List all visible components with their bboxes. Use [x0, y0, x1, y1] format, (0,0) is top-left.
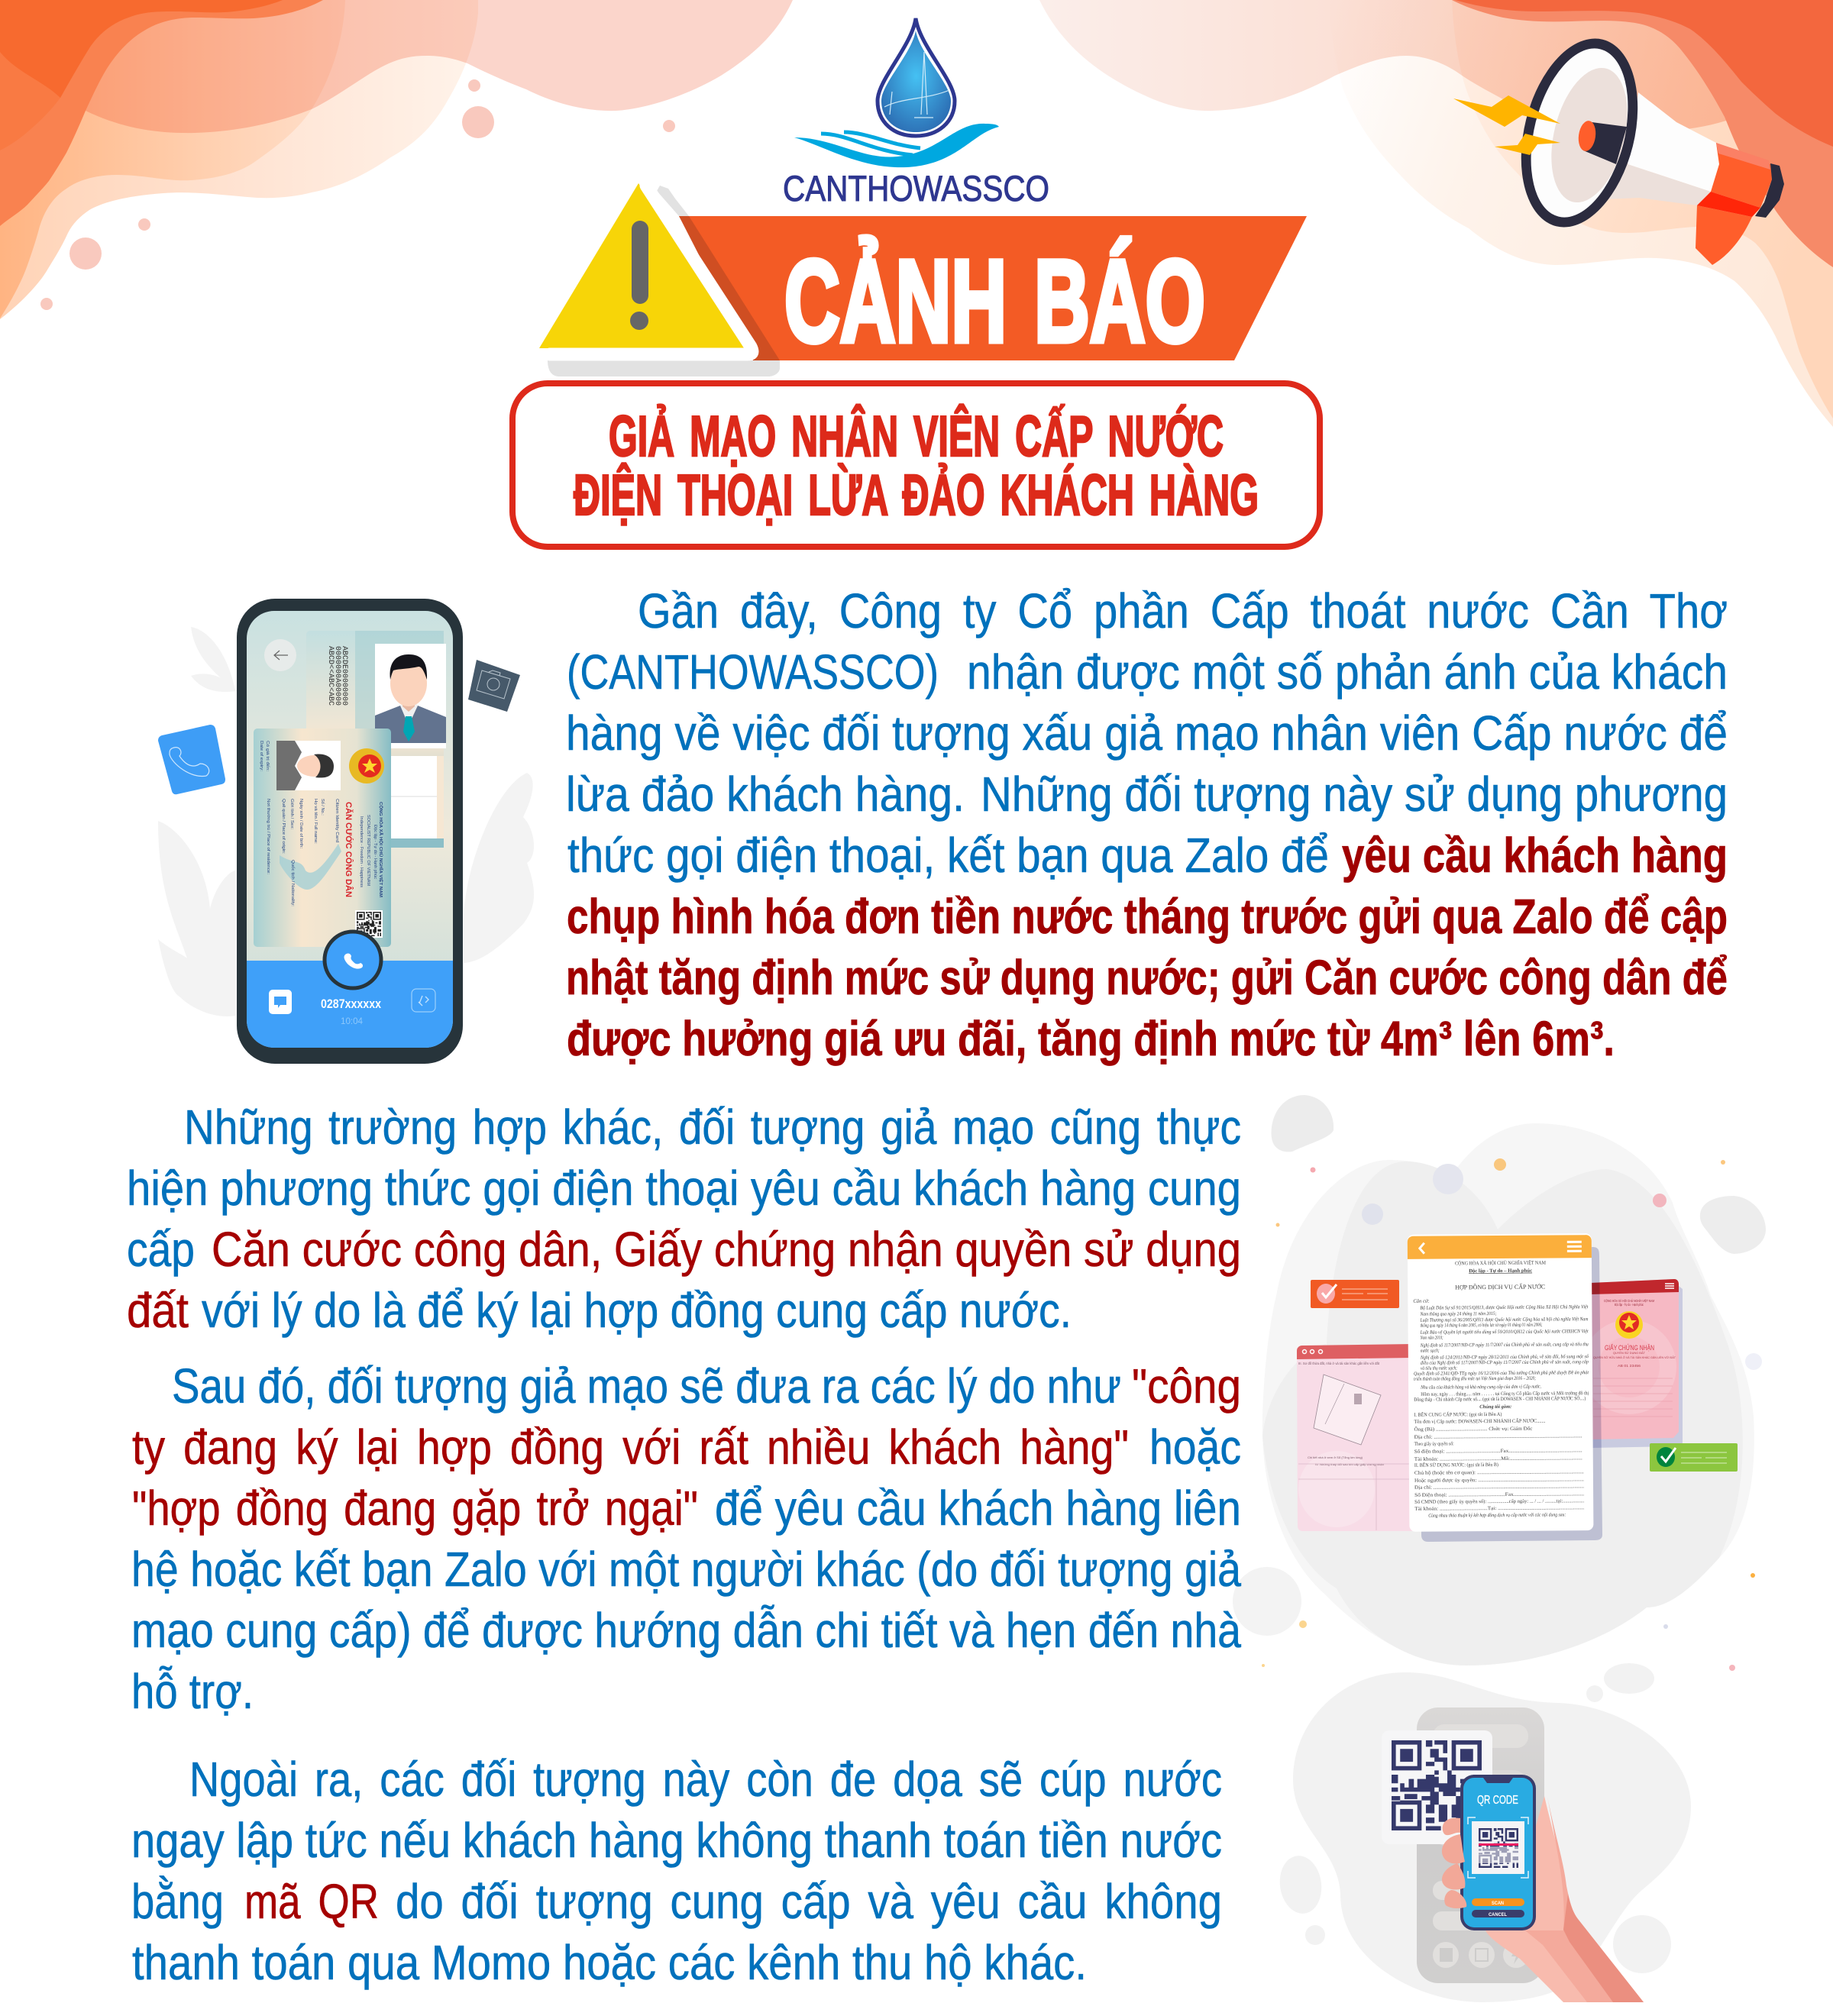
pink land-use document: Chi tiết nhà ở xem ở Sổ (Tổng lớn lóng)	[1308, 1455, 1363, 1459]
contract text: triển thành toàn thống đồng đều mức tại Việt Nam giai đoạn 2016 – 2020;	[1414, 1376, 1536, 1382]
contract text: HỢP ĐỒNG DỊCH VỤ CẤP NƯỚC	[1455, 1283, 1545, 1291]
text block: intro paragraph	[566, 583, 1728, 1066]
contract text: Tài khoản: ............................................Mã:....................................................	[1414, 1455, 1582, 1462]
line 1: Những trường hợp khác, đối tượng giả mạo cũng thực	[184, 1100, 1241, 1155]
text block: second paragraph: với lý do là để ký lại hợp đồng cung cấp nước.	[202, 1283, 1072, 1338]
contract text: II. BÊN SỬ DỤNG NƯỚC: (gọi tắt là Bên B)	[1414, 1462, 1498, 1468]
red certificate: AB 01 23456	[1618, 1364, 1641, 1368]
back band red	[1697, 192, 1760, 217]
card labels: Date of expiry:	[259, 741, 263, 771]
front of ID card	[254, 729, 391, 947]
call time: 10:04	[341, 1016, 363, 1026]
red certificate: Độc lập - Tự do - Hạnh phúc	[1615, 1303, 1644, 1307]
contract text: Nam thông qua ngày 24 tháng 11 năm 2015;	[1420, 1311, 1496, 1317]
card labels: Quốc tịch / Nationality:	[290, 860, 295, 906]
blue phone tile	[158, 725, 225, 794]
text block: third paragraph	[131, 1359, 1241, 1719]
contract text: Nghị định số 124/2011/NĐ-CP ngày 28/12/2011 của Chính phủ, về sửa đổi, bổ sung một số	[1420, 1354, 1589, 1361]
contract text: Theo giấy ủy quyền số:	[1414, 1441, 1454, 1447]
illustration: phone with ID cards	[158, 599, 534, 1064]
text block: fourth paragraph: do đối tượng cung cấp và yêu cầu không	[396, 1874, 1222, 1929]
chat button	[269, 990, 292, 1014]
icon: wave stripes	[821, 132, 920, 155]
text block: third paragraph: hệ hoặc kết bạn Zalo với một người khác (do đối tượng giả	[131, 1542, 1241, 1597]
decorative dots	[1262, 1158, 1762, 1671]
call bar	[247, 961, 453, 1048]
text block: second paragraph: Căn cước công dân, Giấy chứng nhận quyền sử dụng	[212, 1222, 1241, 1277]
fingers	[1442, 1818, 1466, 1908]
QR CODE label: QR CODE	[1477, 1794, 1518, 1807]
contract text: Chúng tôi gồm:	[1479, 1404, 1511, 1410]
back cap dark	[1755, 163, 1784, 218]
small photo	[276, 741, 341, 790]
icon: water drop inner	[881, 31, 951, 132]
background: top left orange waves	[0, 0, 793, 319]
contract text: I. BÊN CUNG CẤP NƯỚC: (gọi tắt là Bên A)	[1414, 1411, 1502, 1418]
triangle grey shadow bottom	[548, 360, 780, 376]
card labels: SOCIALIST REPUBLIC OF VIETNAM	[366, 815, 370, 886]
scan button	[1472, 1898, 1524, 1906]
red certificate: QUYỀN SỞ HỮU NHÀ Ở VÀ TÀI SẢN KHÁC GẮN LIỀN VỚI ĐẤT	[1593, 1355, 1676, 1359]
banner: Cảnh báo	[539, 183, 1307, 376]
icon: water drop outer	[878, 18, 955, 136]
illustration: documents	[1233, 1095, 1766, 1671]
contract text: Căn cứ:	[1413, 1299, 1430, 1304]
text block: third paragraph: để yêu cầu khách hàng liên	[715, 1481, 1241, 1536]
contract text	[1413, 1259, 1590, 1519]
contract text: và tiêu thụ nước sạch;	[1421, 1365, 1457, 1371]
paper	[1408, 1233, 1593, 1532]
rim	[1503, 26, 1656, 240]
card labels: CĂN CƯỚC CÔNG DÂN	[344, 802, 354, 897]
icon: blue wave	[794, 124, 999, 167]
contract text: Luật Bảo vệ Quyền lợi người tiêu dùng số 59/2010/QH12 của Quốc hội nước CHXHCN Việt	[1420, 1329, 1589, 1336]
horn beige	[1605, 164, 1711, 205]
inner beige cone	[1539, 60, 1640, 210]
card labels: Giới tính / Sex:	[289, 799, 294, 829]
card labels: Ngày sinh / Date of birth:	[299, 799, 303, 848]
back button	[264, 639, 296, 671]
lightning bolts	[1453, 95, 1560, 155]
cap	[1576, 120, 1598, 152]
text block: second paragraph: đất	[127, 1283, 189, 1338]
handle	[1696, 205, 1752, 265]
card labels: Quê quán / Place of origin:	[281, 799, 286, 854]
card labels: Họ và tên / Full name:	[313, 799, 318, 844]
contract text: Địa chỉ: ..............................................................................................................	[1414, 1484, 1584, 1491]
back band top light	[1716, 143, 1770, 170]
text block: fourth paragraph: ngay lập tức nếu khách hàng không thanh toán tiền nước	[131, 1813, 1222, 1868]
text block: fourth paragraph: bằng	[131, 1874, 224, 1929]
red certificate: CỘNG HÒA XÃ HỘI CHỦ NGHĨA VIỆT NAM	[1604, 1297, 1654, 1303]
leaves	[158, 627, 534, 1016]
rotate button	[412, 989, 435, 1012]
banner title: CẢNH BÁO	[784, 236, 1205, 367]
card labels: Độc lập - Tự do - Hạnh phúc	[373, 825, 377, 879]
pink land-use document	[1297, 1344, 1413, 1531]
background blobs	[1276, 1663, 1691, 2002]
text block: third paragraph: mạo cung cấp) để được hướng dẫn chi tiết và hẹn đến nhà	[131, 1603, 1241, 1658]
document shadow	[1421, 1247, 1602, 1542]
header menu	[1567, 1242, 1582, 1251]
main contract document	[1408, 1233, 1593, 1532]
text block: intro paragraph: nhận được một số phản ánh của khách	[967, 645, 1728, 699]
cancel button: CANCEL	[1489, 1913, 1507, 1917]
contract text: nước sạch;	[1421, 1349, 1440, 1354]
contract text: Bộ Luật Dân Sự số 91/2015/QH13, được Quốc Hội nước Cộng Hòa Xã Hội Chủ Nghĩa Việt	[1420, 1304, 1589, 1311]
logo wordmark: CANTHOWASSCO	[783, 168, 1049, 208]
banner shadow of triangle	[679, 216, 780, 360]
back of ID card: ABCD<<ABC<ABC	[326, 646, 335, 706]
background: top right orange waves	[1039, 0, 1833, 427]
red certificate: GIẤY CHỨNG NHẬN	[1605, 1344, 1654, 1352]
contract text: CỘNG HÒA XÃ HỘI CHỦ NGHĨA VIỆT NAM	[1455, 1260, 1546, 1266]
pink land-use document: IV. Những thay đổi sau khi cấp giấy chứng nhận	[1315, 1462, 1384, 1466]
banner shape	[679, 216, 1307, 360]
scan button: SCAN	[1492, 1901, 1504, 1906]
icon: bridge inside drop	[884, 52, 949, 118]
card QR	[355, 910, 383, 938]
back of ID card	[306, 631, 444, 848]
contract text: Tài khoản: ...................................Tại: ...............................................................	[1414, 1505, 1585, 1512]
card labels: CỘNG HÒA XÃ HỘI CHỦ NGHĨA VIỆT NAM	[378, 802, 384, 897]
rim inner white	[1515, 38, 1644, 228]
orange check badge	[1311, 1280, 1399, 1308]
contract text: Ông (Bà) ...................................... Chức vụ: Giám Đốc	[1414, 1426, 1533, 1433]
call button	[325, 932, 381, 988]
cancel button	[1472, 1910, 1524, 1917]
text block: intro paragraph: (CANTHOWASSCO)	[567, 645, 939, 699]
subtitle line 2: ĐIỆN THOẠI LỪA ĐẢO KHÁCH HÀNG	[574, 463, 1259, 527]
megaphone icon	[1453, 26, 1784, 265]
card labels: Số / No.:	[320, 799, 325, 816]
text block: intro paragraph: hàng về việc đối tượng xấu giả mạo nhân viên Cấp nước để	[566, 706, 1728, 761]
MRZ lines: ABCDE00000000	[340, 646, 348, 706]
triangle white outline on right	[550, 186, 752, 354]
contract text: điều của Nghị định số 117/2007/NĐ-CP ngày 11/7/2007 của Chính phủ về sản xuất, cung cấp	[1421, 1359, 1589, 1366]
background blobs	[1233, 1095, 1766, 1665]
line 1: Ngoài ra, các đối tượng này còn đe dọa sẽ cúp nước	[189, 1752, 1222, 1807]
subtitle line 1: GIẢ MẠO NHÂN VIÊN CẤP NƯỚC	[609, 404, 1224, 468]
header back arrow	[1420, 1243, 1424, 1254]
contract text: Cùng nhau thỏa thuận ký kết hợp đồng dịch vụ cấp nước với các nội dung sau:	[1428, 1512, 1566, 1519]
contract text: Độc lập - Tự do – Hạnh phúc	[1469, 1268, 1532, 1274]
card labels: Nơi thường trú / Place of residence:	[266, 799, 270, 874]
phone screen	[247, 611, 453, 1048]
right document shadow	[1592, 1286, 1683, 1448]
exclamation mark	[630, 221, 648, 330]
QR card	[1382, 1730, 1492, 1844]
portrait photo	[375, 644, 446, 748]
contract text: Số CMND (theo giấy ủy quyền số): .................cấp ngày: ... / ... / .........tại:.................	[1414, 1498, 1585, 1505]
grey phone	[1417, 1707, 1544, 1983]
neck	[1583, 122, 1627, 164]
decorative pink dots	[40, 79, 675, 310]
triangle grey shadow top	[657, 186, 689, 216]
contract text: Hoặc người được ủy quyền: ............................................................................	[1414, 1477, 1584, 1484]
text block: intro paragraph: Những đối tượng này sử dụng phương	[981, 767, 1728, 822]
contract text: thông qua ngày 14 tháng 6 năm 2005, có hiệu lực từ ngày 01 tháng 01 năm 2006;	[1421, 1323, 1543, 1329]
orange header	[1408, 1235, 1592, 1259]
card labels: Có giá trị đến:	[265, 741, 270, 772]
subtitle box	[512, 383, 1320, 547]
contract text: Địa chỉ: ........................................................................................................	[1414, 1433, 1582, 1440]
logo: Canthowassco	[783, 18, 1049, 208]
text block: third paragraph: "công	[1132, 1359, 1241, 1413]
contract text: Tên đơn vị Cấp nước: DOWASEN-CHI NHÁNH CẤP NƯỚC.......	[1414, 1418, 1546, 1425]
contract text: Hôm nay, ngày . . . tháng..... năm . . . . . . tại Công ty Cổ phần Cấp nước và Môi trường đô thị	[1421, 1391, 1589, 1397]
red certificate: QUYỀN SỬ DỤNG ĐẤT	[1613, 1351, 1646, 1355]
hand back	[1485, 1796, 1644, 2002]
horn white	[1628, 92, 1719, 192]
contract text: Chủ hộ (hoặc tên cơ quan): ............................................................................	[1414, 1469, 1584, 1476]
contract text: Đồng tháp - Chi nhánh Cấp nước số.... (gọi tắt là DOWASEN - CHI NHÁNH CẤP NƯỚC SỐ....)	[1414, 1395, 1586, 1403]
text block: fourth paragraph: thanh toán qua Momo hoặc các kênh thu hộ khác.	[132, 1935, 1087, 1990]
card labels: Citizen Identity Card	[335, 799, 339, 842]
line 1: Sau đó, đối tượng giả mạo sẽ đưa ra các lý do như	[172, 1359, 1121, 1413]
text block: intro paragraph: thức gọi điện thoại, kết bạn qua Zalo để	[567, 828, 1329, 883]
back of ID card: 0000000A00000	[333, 646, 341, 706]
red certificate	[1582, 1279, 1679, 1439]
contract text: Nhu cầu của khách hàng và khả năng cung cấp của đơn vị Cấp nước.	[1420, 1384, 1541, 1391]
text block: second paragraph: cấp	[127, 1222, 195, 1277]
card labels: Independence - Freedom - Happiness	[359, 816, 364, 887]
scan frame	[1468, 1817, 1528, 1878]
text block: second paragraph: hiện phương thức gọi điện thoại yêu cầu khách hàng cung	[127, 1161, 1241, 1216]
contract text: Nam năm 2010;	[1420, 1335, 1443, 1341]
back band	[1711, 143, 1772, 208]
contract text: Số Điện thoại: ........................................Fax..................................................	[1414, 1491, 1585, 1498]
contract text: Luật Thương mại số 36/2005/QH11 được Quốc hội nước Cộng hòa xã hội chủ nghĩa Việt Nam	[1420, 1317, 1589, 1323]
text block: third paragraph: hỗ trợ.	[131, 1664, 254, 1719]
text block: intro paragraph: yêu cầu khách hàng	[1342, 828, 1728, 883]
text block: third paragraph: ty đang ký lại hợp đồng với rất nhiều khách hàng"	[132, 1420, 1129, 1475]
dark camera tile	[468, 660, 520, 712]
pink land-use document: III. Sơ đồ thửa đất, nhà ở và tài sản khác gắn liền với đất	[1298, 1361, 1380, 1365]
text block: second paragraph	[127, 1100, 1241, 1338]
illustration: QR code payment	[1276, 1663, 1691, 2002]
phone body	[237, 599, 463, 1064]
contract text: Quyết định số 2341/QĐ-TTg ngày 16/12/2016 của Thủ tướng Chính phủ phê duyệt Đề án phát	[1414, 1370, 1589, 1377]
inner QR	[1472, 1821, 1524, 1874]
hand dark shade	[1563, 1894, 1644, 2002]
text block: intro paragraph: lừa đảo khách hàng.	[566, 767, 965, 822]
card labels	[259, 741, 384, 906]
phone number: 0287xxxxxx	[321, 997, 381, 1011]
text block: third paragraph: hoặc	[1149, 1420, 1241, 1475]
text block: fourth paragraph: mã QR	[244, 1874, 379, 1929]
text block: third paragraph: "hợp đồng đang gặp trở ngại"	[132, 1481, 698, 1536]
hand mid shade	[1525, 1796, 1644, 2002]
emblem	[349, 748, 384, 783]
warning triangle	[539, 183, 745, 348]
map shape	[280, 844, 341, 890]
text block: intro paragraph: được hưởng giá ưu đãi, tăng định mức từ 4m³ lên 6m³.	[567, 1011, 1615, 1066]
contract text: Số điện thoại: ........................................Fax......................................................	[1414, 1448, 1582, 1455]
text block: fourth paragraph	[131, 1752, 1222, 1990]
scanning phone	[1460, 1775, 1536, 1930]
box outline	[512, 383, 1320, 547]
contract text: Nghị định số 117/2007/NĐ-CP ngày 11/7/2007 của Chính phủ về sản xuất, cung cấp và tiêu thụ	[1420, 1342, 1589, 1349]
green check badge	[1650, 1443, 1738, 1472]
